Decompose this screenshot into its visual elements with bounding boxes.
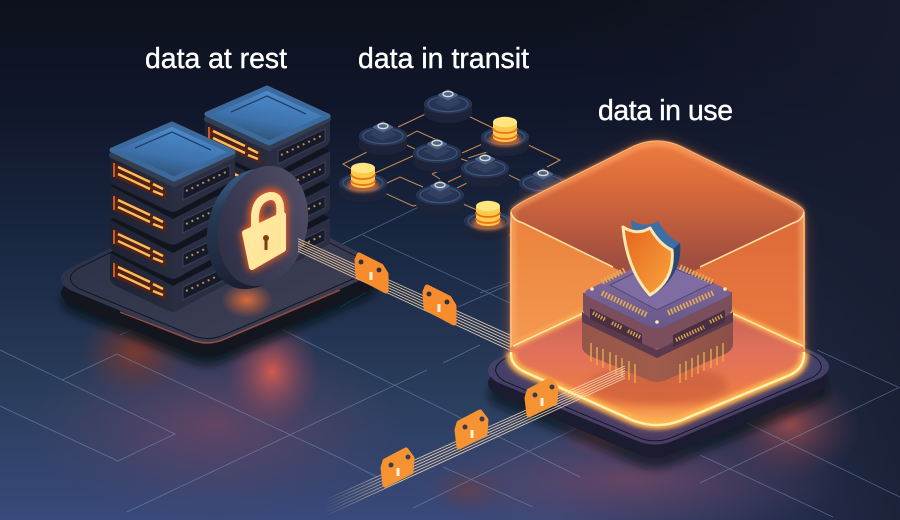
network node: top [424,90,472,123]
network node: coin stack left [339,163,387,202]
data packet 5 [527,380,556,415]
icon: processor chip [582,259,733,383]
icon: padlock disk [195,156,320,299]
platform: data in use [488,281,829,468]
chip pins right [680,343,723,383]
heading: data at rest: data at rest [145,43,287,75]
chip gold contacts [602,267,713,315]
glass enclosure [510,141,805,425]
data wires: rest to use [298,239,512,351]
chip top face [585,259,730,328]
floor grid lines [0,203,900,517]
server stack: front [110,124,235,312]
server stack: back [205,88,330,276]
heading: data in use: data in use [598,95,733,127]
glass floor [510,282,805,425]
network node: lower center [416,182,464,214]
data packet 4 [457,412,486,447]
data packet 2 [425,287,454,323]
icon: shield [623,220,680,295]
chip top layer [583,292,732,348]
network node: coin stack right [481,117,529,156]
data packet 1 [357,255,386,291]
glass top face [510,141,805,289]
platform: data at rest [61,193,376,365]
glass soft edge glow [513,144,802,350]
data wires: transit to use [325,366,625,516]
glass front top edges [511,212,804,267]
chip base layer [582,322,733,382]
network node: upper left [359,122,407,155]
heading: data in transit: data in transit [358,43,529,75]
network node: center [413,140,461,172]
network connection lines [343,111,560,236]
network node: behind glass [519,170,567,202]
chip pins left [591,343,635,383]
glass right wall [657,213,805,425]
network node: center right [461,154,509,187]
data packet 3 [383,450,412,485]
network node: coin stack bottom [464,201,512,240]
